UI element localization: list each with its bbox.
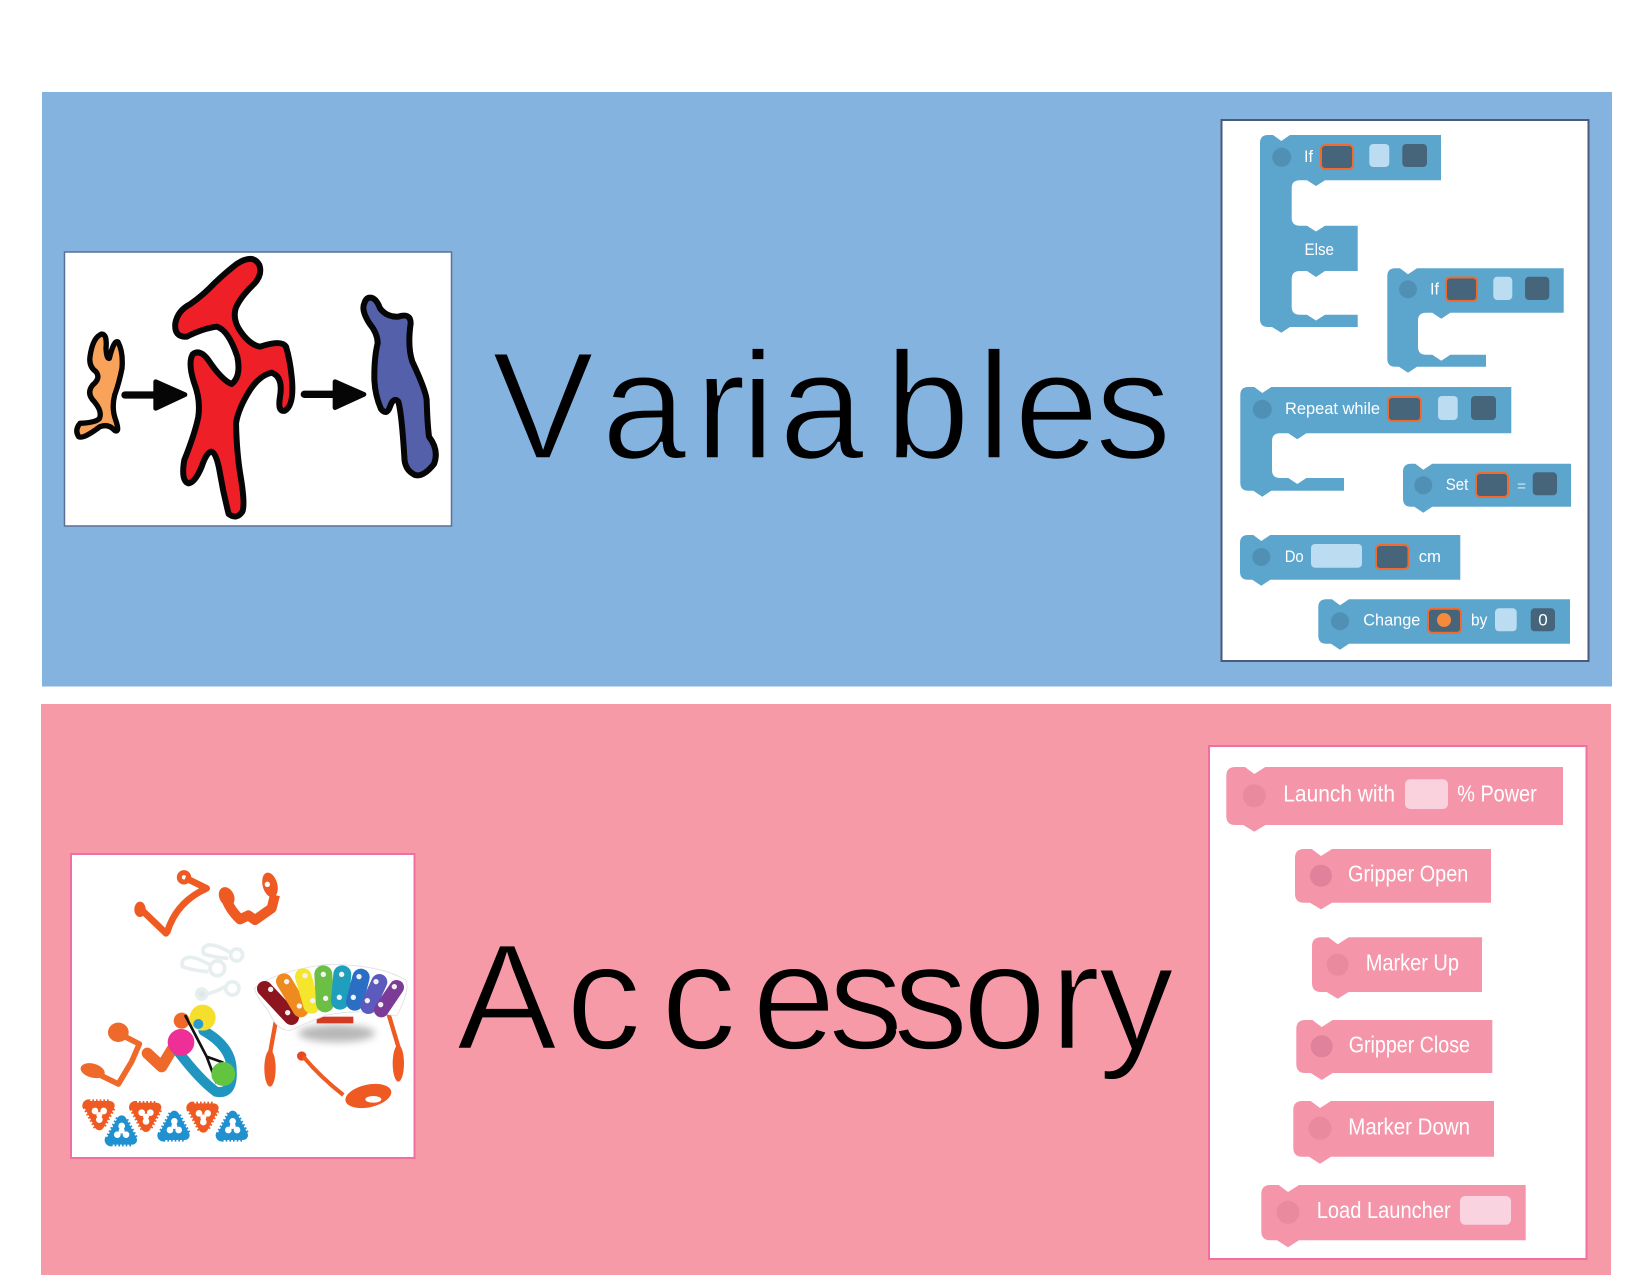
- panel: variables: [42, 92, 1612, 686]
- block: marker down: [1293, 1101, 1494, 1164]
- accessory photo card: [71, 854, 414, 1158]
- icon: growth sequence of blobs and arrows: [77, 259, 436, 517]
- block: nested if: [1387, 268, 1564, 373]
- icon: top right orange arm: [216, 871, 280, 920]
- illustration frame: [64, 252, 452, 526]
- icon: top left orange arm: [135, 873, 207, 933]
- icon: white clips: [182, 945, 243, 999]
- block: repeat while: Repeat while: [1285, 399, 1380, 418]
- icon: orange gear 3: [193, 1108, 214, 1128]
- variables illustration card: [64, 252, 452, 526]
- variables panel background: [42, 92, 1612, 686]
- block: do cm: cm: [1419, 547, 1441, 566]
- photo frame: [71, 854, 414, 1158]
- block: set: =: [1517, 478, 1526, 495]
- block: if else: [1260, 135, 1441, 333]
- block: if else: Else: [1304, 240, 1334, 259]
- block: launch with power: % Power: [1457, 781, 1537, 807]
- block: change by: by: [1471, 610, 1488, 630]
- accessory card frame: [1209, 746, 1586, 1259]
- block: change by: 0: [1538, 610, 1548, 630]
- icon: gear triangles: [89, 1106, 243, 1140]
- icon: robot accessories collage: [79, 871, 407, 1140]
- arrow: red to blue: [304, 382, 364, 408]
- block: marker down: Marker Down: [1348, 1114, 1470, 1140]
- block: gripper open: Gripper Open: [1348, 860, 1468, 886]
- heading: Variables: Variables: [492, 320, 1172, 492]
- block: gripper close: [1296, 1020, 1492, 1080]
- block: set: [1403, 464, 1571, 513]
- block: do cm: [1240, 535, 1460, 586]
- block: if else: If: [1304, 147, 1313, 166]
- icon: blue gear 1: [111, 1120, 132, 1140]
- icon: left orange arm: [79, 1023, 172, 1084]
- arrow: orange to red: [125, 382, 185, 408]
- block: launch with power: [1226, 767, 1563, 832]
- code blocks card: [1222, 120, 1588, 661]
- icon: large red blob: [175, 259, 292, 517]
- block: nested if: If: [1430, 280, 1439, 298]
- panel: accessory: [41, 704, 1611, 1275]
- block: gripper close: Gripper Close: [1349, 1032, 1470, 1058]
- block: load launcher: Load Launcher: [1317, 1197, 1451, 1223]
- icon: slingshot launcher: [168, 1005, 235, 1092]
- block: change by: Change: [1363, 610, 1420, 630]
- block: load launcher: [1261, 1185, 1526, 1247]
- block: change by: [1318, 599, 1570, 650]
- block: do cm: Do: [1285, 547, 1304, 566]
- block: set: Set: [1446, 475, 1469, 494]
- icon: orange gear 1: [89, 1106, 110, 1126]
- icon: xylophone: [254, 964, 407, 1087]
- icon: mallet: [297, 1051, 394, 1112]
- heading: Accessory: Accessory: [456, 912, 1174, 1081]
- accessory code blocks card: [1209, 746, 1586, 1259]
- block: launch with power: Launch with: [1283, 781, 1395, 807]
- block: gripper open: [1295, 849, 1491, 909]
- icon: blue gear 3: [222, 1115, 243, 1135]
- icon: blue gear 2: [164, 1115, 185, 1135]
- icon: orange gear 2: [135, 1107, 157, 1127]
- code card frame: [1222, 120, 1588, 661]
- block: repeat while: [1240, 387, 1511, 497]
- block: marker up: Marker Up: [1366, 950, 1459, 976]
- icon: blue blob: [363, 298, 436, 475]
- icon: small orange blob: [77, 334, 122, 437]
- accessory panel background: [41, 704, 1611, 1275]
- block: marker up: [1312, 937, 1482, 999]
